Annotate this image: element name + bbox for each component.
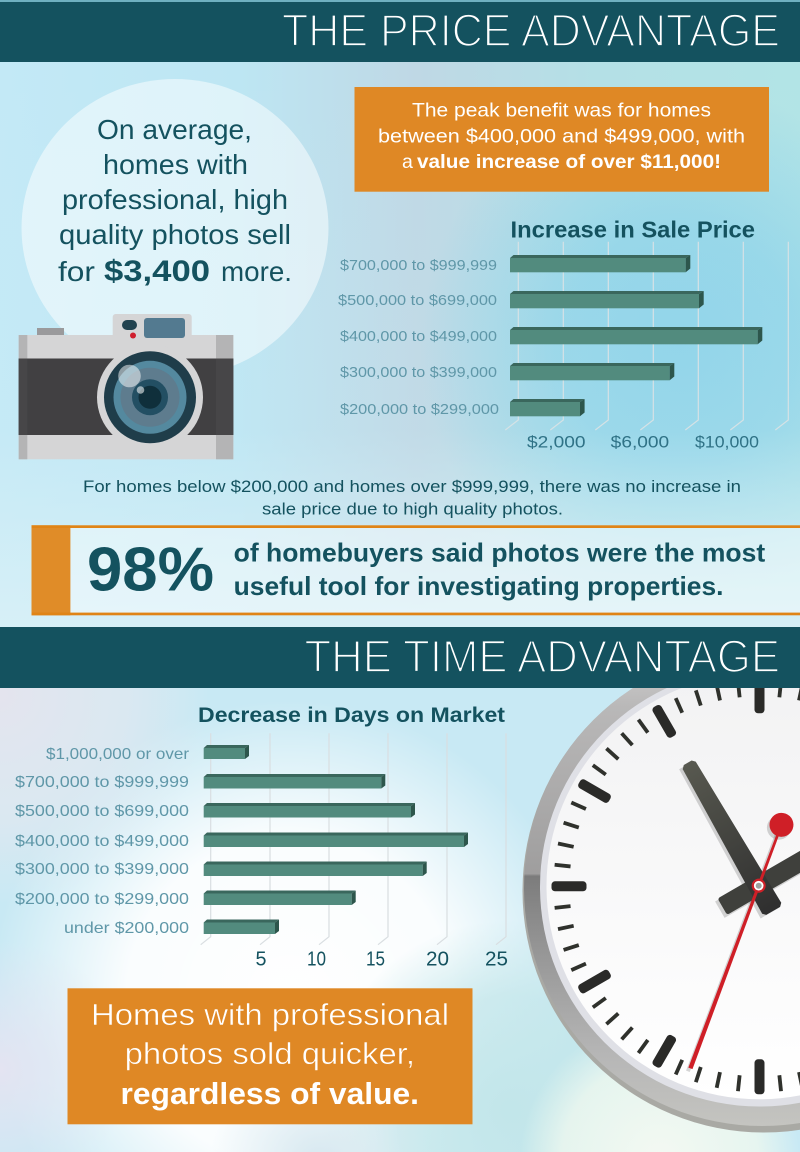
circle callout: average price gain [22, 79, 328, 377]
section background: time advantage [0, 688, 800, 1152]
axis labels [256, 949, 508, 971]
text: on average: homes with [103, 149, 248, 180]
category labels: under $200,000 [64, 920, 189, 937]
text: on average: for [58, 256, 95, 287]
category labels: $500,000 to $699,000 [15, 803, 189, 820]
stat text: useful tool for investigating properties. [234, 571, 723, 601]
heading: the price advantage: THE PRICE ADVANTAGE [282, 5, 780, 56]
category labels: $200,000 to $299,000 [15, 891, 189, 908]
text: no increase note [83, 478, 741, 519]
category labels: $400,000 to $499,000 [15, 833, 189, 850]
category labels: $500,000 to $699,000 [338, 292, 497, 309]
text: on average: $3,400 [104, 255, 210, 288]
callout: peak benefit: between $400,000 and $499,000, with [378, 126, 745, 148]
category labels: $700,000 to $999,999 [15, 774, 189, 791]
callout: sold quicker: Homes with professional [91, 997, 449, 1032]
category labels: $200,000 to $299,000 [340, 401, 499, 418]
text: on average: quality photos sell [59, 219, 291, 250]
stat text: of homebuyers said photos were the most [234, 538, 766, 568]
callout: peak benefit: The peak benefit was for homes [412, 100, 711, 122]
icon: camera [19, 314, 233, 459]
category labels [338, 257, 499, 418]
axis labels: 10 [307, 949, 326, 971]
category labels: $300,000 to $399,000 [15, 861, 189, 878]
header: the time advantage [0, 627, 800, 688]
clock ticks [552, 678, 800, 1094]
category labels: $1,000,000 or over [46, 746, 190, 763]
text: no increase note: For homes below $200,000 and homes over $999,999, there was no increase in [83, 478, 741, 496]
chart title: Increase in Sale Price [510, 216, 755, 242]
bars [204, 745, 468, 934]
axis labels: 15 [366, 949, 385, 971]
text: on average: professional, high [62, 184, 288, 215]
bar chart: decrease in days on market [15, 704, 508, 971]
callout: peak benefit: a [402, 151, 413, 173]
axis labels: $10,000 [695, 432, 759, 451]
category labels [15, 746, 190, 937]
category labels: $700,000 to $999,999 [340, 257, 497, 274]
text: on average: more. [221, 256, 292, 287]
stat text [234, 538, 766, 601]
heading: the time advantage: THE TIME ADVANTAGE [304, 631, 780, 682]
stat number: 98% [87, 536, 214, 605]
axis labels: 20 [426, 949, 449, 971]
bar chart: increase in sale price [338, 216, 788, 451]
axis labels: $2,000 [527, 432, 586, 451]
stat panel: 98 percent [32, 525, 800, 615]
axis labels [527, 432, 759, 451]
category labels: $300,000 to $399,000 [340, 364, 497, 381]
icon: clock [522, 650, 800, 1132]
callout: sold quicker: photos sold quicker, [125, 1036, 415, 1071]
section background: price advantage [0, 0, 800, 628]
category labels: $400,000 to $499,000 [340, 328, 497, 345]
axis labels: 25 [485, 949, 508, 971]
text: on average: On average, [97, 114, 252, 145]
bars [510, 255, 762, 416]
callout: peak benefit: value increase of over $11,000! [417, 151, 721, 173]
callout: sold quicker: regardless of value. [120, 1076, 419, 1111]
callout: peak benefit [354, 87, 769, 192]
chart title: Decrease in Days on Market [198, 704, 505, 727]
header: the price advantage [0, 0, 800, 62]
axis labels: 5 [256, 949, 266, 971]
callout: sold quicker [68, 988, 472, 1124]
axis labels: $6,000 [611, 432, 669, 451]
clock hands [676, 757, 800, 1073]
text: on average [58, 114, 292, 288]
text: no increase note: sale price due to high quality photos. [262, 501, 563, 519]
